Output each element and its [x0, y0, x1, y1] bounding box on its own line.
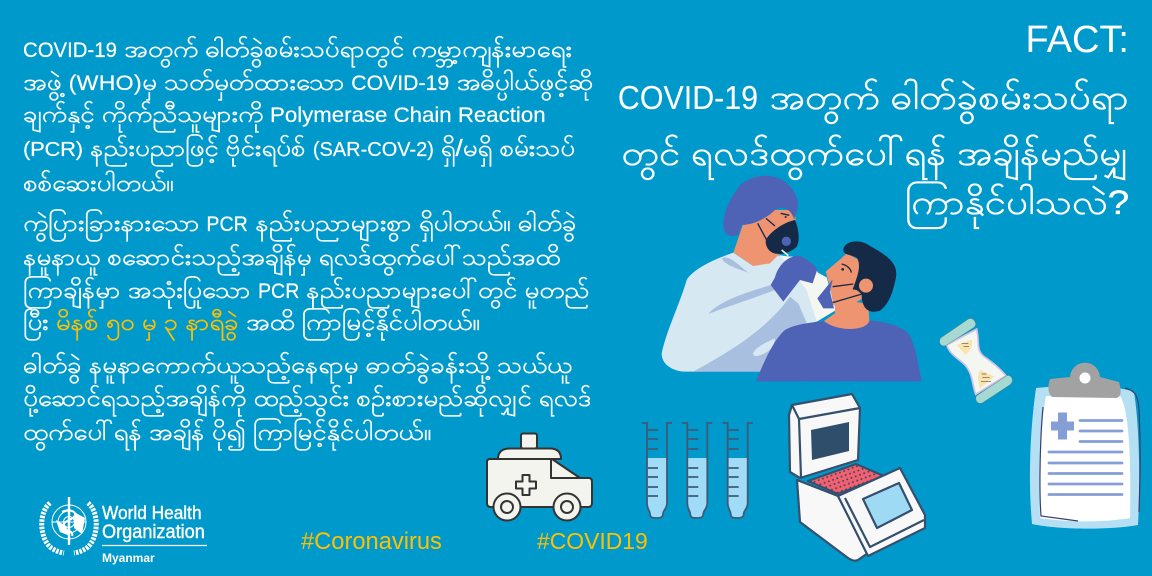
- paragraph 1: စစ်ဆေးပါတယ်။: [23, 170, 174, 196]
- icon: hourglass: [939, 318, 1012, 403]
- WHO logo text: World Health: [102, 503, 202, 523]
- paragraph 1: အတွက် ဓါတ်ခွဲစမ်းသပ်ရာတွင် ကမ္ဘာ့ကျန်းမာရေး: [124, 36, 572, 62]
- machine base: [797, 480, 868, 561]
- title: ကြာနိုင်ပါသလဲ?: [904, 184, 1129, 222]
- icon: ambulance: [487, 434, 592, 520]
- patient neck and face: [824, 300, 869, 329]
- paragraph 2: ပြီး မိနစ် ၅၀ မှ ၃ နာရီခွဲ အထိ ကြာမြင့်နိုင်ပါတယ်။: [23, 309, 480, 335]
- doctor mask: [766, 220, 799, 254]
- icon: clipboard: [1030, 363, 1140, 529]
- paragraph 1: [23, 36, 593, 196]
- logo divider: [102, 544, 207, 546]
- test tube 2: [682, 423, 712, 518]
- paragraph 1: (PCR) နည်းပညာဖြင့် ဗိုင်းရပ်စ် ရှိ/မရှိ စမ်းသပ်: [23, 135, 575, 161]
- paragraph 2: ကြာချိန်မှာ အသုံးပြုသော နည်းပညာများပေါ်တွင် မူတည်: [23, 277, 589, 303]
- paragraph 3: ဓါတ်ခွဲ နမူနာကောက်ယူသည့်နေရာမှ ဓာတ်ခွဲခန်းသို့ သယ်ယူ: [23, 352, 572, 378]
- machine screen: [863, 483, 912, 528]
- WHO logo text: [102, 503, 205, 565]
- hashtag: COVID19: #COVID19: [537, 528, 648, 554]
- test tube 1: [642, 423, 672, 518]
- paragraph 1: ချက်နှင့် ကိုက်ညီသူများကို: [23, 101, 263, 127]
- logo: WHO emblem: [42, 497, 96, 553]
- paragraph 3: [23, 352, 591, 451]
- doctor neck and face: [733, 210, 797, 266]
- paper bib: [780, 255, 836, 322]
- patient mask: [817, 279, 834, 308]
- icon: test tubes: [642, 423, 753, 518]
- WHO logo text: Myanmar: [102, 551, 155, 565]
- doctor gown: [662, 253, 836, 372]
- clipboard paper: [1040, 396, 1130, 521]
- gloved hand: [771, 256, 817, 302]
- machine lid: [789, 394, 860, 478]
- test tube 3: [723, 423, 753, 518]
- hashtag: Coronavirus: #Coronavirus: [301, 529, 442, 555]
- icon: doctor and patient swab test: [662, 176, 922, 381]
- title: FACT:: [1026, 19, 1129, 61]
- paragraph 3: ထွက်ပေါ်ရန် အချိန် ပို၍ ကြာမြင့်နိုင်ပါတယ်။: [23, 419, 431, 445]
- paragraph 1: Polymerase Chain Reaction: [270, 103, 546, 127]
- paragraph 2: [23, 209, 589, 341]
- patient shirt: [756, 321, 922, 381]
- title: အတွက် ဓါတ်ခွဲစမ်းသပ်ရာ: [770, 79, 1129, 117]
- paragraph 2: ကွဲပြားခြားနားသော နည်းပညာများစွာ ရှိပါတယ်။ ဓါတ်ခွဲ: [23, 210, 576, 236]
- clipboard clip: [1048, 363, 1121, 398]
- paragraph 2: နမူနာယူ စဆောင်းသည့်အချိန်မှ ရလဒ်ထွက်ပေါ်သည်အထိ: [23, 244, 560, 270]
- title: တွင် ရလဒ်ထွက်ပေါ်ရန် အချိန်မည်မျှ: [621, 135, 1129, 173]
- title: [618, 19, 1129, 230]
- title: COVID-19: [618, 79, 758, 116]
- WHO logo text: Organization: [102, 521, 205, 543]
- patient hair: [843, 241, 896, 312]
- clipboard board: [1030, 386, 1139, 529]
- paragraph 1: (SAR-COV-2): [313, 139, 434, 161]
- paragraph 1: အဖွဲ့ (WHO)မှ သတ်မှတ်ထားသော အဓိပ္ပါယ်ဖွင့်ဆို: [23, 69, 593, 95]
- machine sample tray: [808, 464, 884, 494]
- paragraph 3: ပို့ဆောင်ရသည့်အချိန်ကို ထည့်သွင်း စဉ်းစားမည်ဆိုလျှင် ရလဒ်: [23, 385, 591, 411]
- paragraph 1: COVID-19: [352, 72, 449, 95]
- paragraph 2: PCR: [258, 280, 299, 303]
- doctor hat: [723, 176, 798, 236]
- medical cross and lines: [1052, 413, 1074, 439]
- paragraph 2: PCR: [207, 213, 248, 236]
- paragraph 1: COVID-19: [23, 39, 117, 62]
- icon: PCR machine: [789, 394, 925, 561]
